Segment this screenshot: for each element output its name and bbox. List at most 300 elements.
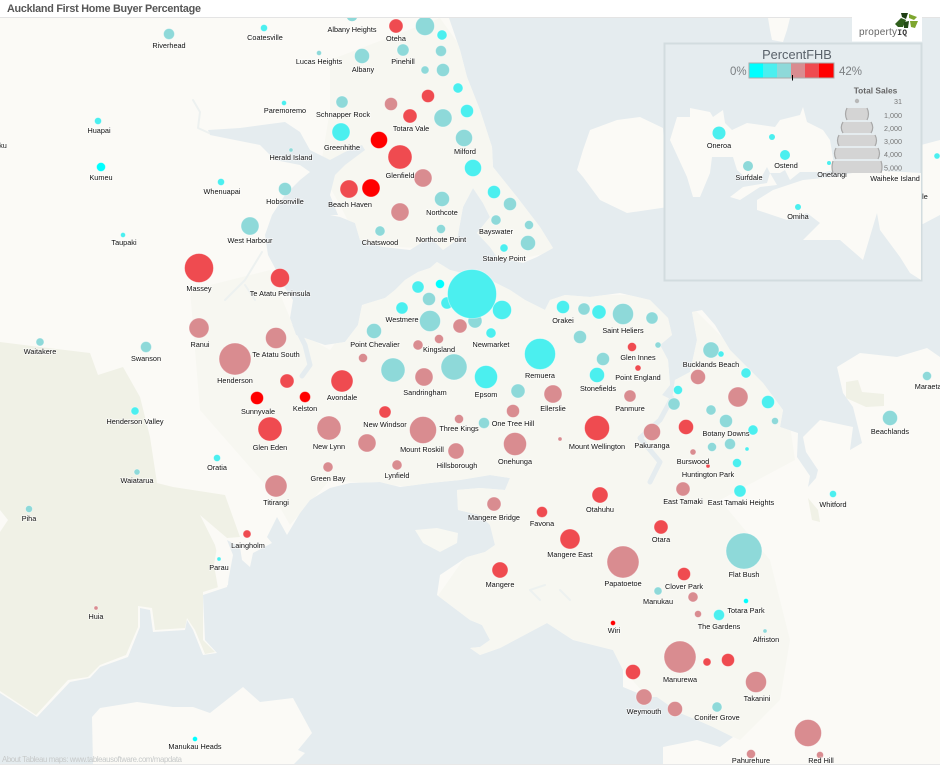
label: Schnapper Rock bbox=[316, 110, 370, 119]
label: Waiatarua bbox=[120, 476, 154, 485]
bubble: Conifer Grove bbox=[712, 702, 722, 712]
label: Chatswood bbox=[362, 238, 398, 247]
label: Conifer Grove bbox=[694, 713, 740, 722]
inset background bbox=[664, 44, 922, 280]
logo: propertyIQ bbox=[852, 13, 922, 42]
colour ramp bbox=[749, 63, 834, 80]
label: Omiha bbox=[787, 212, 810, 221]
label: Otara bbox=[652, 535, 671, 544]
map: Whitford park patch bbox=[808, 498, 820, 522]
bubble: Coatesville bbox=[260, 24, 268, 32]
inset panel: Waiheke Island map and legends bbox=[664, 44, 922, 280]
label: Hillsborough bbox=[437, 461, 477, 470]
bubble: Manukau Heads bbox=[192, 736, 198, 742]
bubble: Whenuapai bbox=[218, 178, 224, 186]
label: Whenuapai bbox=[204, 187, 241, 196]
legend: Total Sales size scale bbox=[832, 86, 902, 173]
bubble: Northcote bbox=[434, 192, 450, 206]
bubble: east of inset bbox=[934, 153, 940, 159]
bubble: Paremoremo bbox=[282, 100, 286, 106]
label: Sandringham bbox=[403, 388, 447, 397]
bubble: Avondale bbox=[331, 370, 353, 392]
bubble: East Tamaki Heights bbox=[734, 485, 746, 497]
inset bubble: Onetangi bbox=[827, 161, 831, 165]
bubble: Taupaki bbox=[120, 232, 126, 238]
bubble: Papakura bbox=[794, 720, 822, 746]
map: Parau foreshore bbox=[214, 547, 230, 588]
bubble: Panmure bbox=[624, 390, 636, 402]
bubble: Oratia bbox=[214, 454, 220, 462]
label: Papatoetoe bbox=[604, 579, 642, 588]
label: Onetangi bbox=[817, 170, 847, 179]
label: Titirangi bbox=[263, 498, 289, 507]
bubble: New Lynn bbox=[317, 416, 341, 440]
bubble: Albany bbox=[354, 48, 370, 64]
label: Mount Roskill bbox=[400, 445, 444, 454]
inset bubble: Oneroa bbox=[712, 126, 726, 140]
bubble: Ranui bbox=[189, 318, 209, 338]
bubble: Howick bbox=[728, 387, 748, 407]
label: Riverhead bbox=[152, 41, 186, 50]
label: Panmure bbox=[615, 404, 645, 413]
bubble: Grey Lynn bbox=[422, 292, 436, 306]
label: Albany Heights bbox=[327, 25, 377, 34]
bubble: Glen Eden bbox=[258, 417, 282, 441]
bubble: Lucas Heights bbox=[316, 50, 322, 56]
bubble: Hillpark bbox=[694, 610, 702, 618]
label: Huntington Park bbox=[682, 470, 735, 479]
bubble: Waterview bbox=[358, 354, 368, 362]
inset labels bbox=[707, 141, 847, 221]
bubble: Manurewa East bbox=[703, 658, 711, 666]
label: Clover Park bbox=[665, 582, 703, 591]
label: Remuera bbox=[525, 371, 556, 380]
bubble: Takapuna bbox=[464, 160, 482, 176]
label: Glen Eden bbox=[253, 443, 287, 452]
bubble: Huia bbox=[94, 606, 98, 610]
bubble: Goodwood Heights bbox=[688, 592, 698, 602]
bubble: Mission Bay bbox=[578, 303, 590, 315]
bubble: Belmont bbox=[504, 198, 516, 210]
bubble: Huntington Park bbox=[706, 464, 710, 468]
bubble: Highland Park bbox=[678, 420, 694, 434]
label: Weymouth bbox=[627, 707, 661, 716]
bubble: Sunnyvale bbox=[250, 392, 264, 404]
bubble: Henderson Valley bbox=[131, 407, 139, 415]
label: Red Hill bbox=[808, 756, 834, 765]
bubble: Half Moon Bay bbox=[668, 398, 680, 410]
bubble: Devonport bbox=[520, 236, 536, 250]
bubble: Shamrock Park bbox=[732, 458, 742, 468]
label: Paremoremo bbox=[264, 106, 306, 115]
bubble: Eastern Beach north bbox=[718, 351, 724, 357]
label: Greenhithe bbox=[324, 143, 360, 152]
bubble: Cockle Bay bbox=[762, 396, 774, 408]
label: Northcote bbox=[426, 208, 458, 217]
label: Stanley Point bbox=[482, 254, 526, 263]
bubble: Farm Cove bbox=[690, 370, 706, 384]
bubble: Hillsborough bbox=[448, 443, 464, 459]
bubble: Te Atatu Peninsula bbox=[270, 268, 290, 288]
bubble: Henderson bbox=[219, 343, 251, 375]
bubble: Mairangi Bay bbox=[460, 104, 474, 118]
title: Auckland First Home Buyer Percentage bbox=[7, 3, 201, 15]
bubble: Papatoetoe bbox=[607, 546, 639, 578]
label: Lynfield bbox=[385, 471, 409, 480]
bubble: Alfriston bbox=[763, 629, 767, 633]
bubble: Herne Bay bbox=[436, 280, 444, 288]
bubble: Mangere East bbox=[560, 529, 580, 549]
map: Upper Waitemata Harbour bbox=[208, 122, 365, 215]
label: Huapai bbox=[87, 126, 111, 135]
bubble: Botany Downs bbox=[720, 414, 732, 428]
bubble: Wairau Valley bbox=[370, 132, 388, 148]
bubble: Kohimarama bbox=[592, 305, 606, 319]
bubble: Totara Vale bbox=[403, 109, 417, 123]
label: Whitford bbox=[819, 500, 847, 509]
bubble: Kelston bbox=[300, 392, 310, 402]
label: Alfriston bbox=[753, 635, 779, 644]
logo wordmark: propertyIQ bbox=[859, 27, 907, 38]
bubble: Saint Heliers bbox=[612, 304, 634, 324]
bubble: Glendowie bbox=[646, 312, 658, 324]
bubble: Browns Bay bbox=[436, 64, 450, 76]
bubble: Beach Haven bbox=[340, 180, 358, 198]
label: Totara Park bbox=[727, 606, 765, 615]
bubble: Favona bbox=[536, 506, 548, 518]
label: Hobsonville bbox=[266, 197, 304, 206]
label: Point England bbox=[615, 373, 661, 382]
bubble: The Gardens bbox=[714, 610, 724, 620]
bubble: Golflands bbox=[708, 442, 716, 452]
attribution text: About Tableau maps: www.tableausoftware.com/mapdata bbox=[2, 755, 183, 764]
bubble: Pahurehure bbox=[746, 750, 756, 758]
bubble: Parau bbox=[217, 557, 221, 561]
label: Pakuranga bbox=[634, 441, 671, 450]
label: Three Kings bbox=[439, 424, 479, 433]
label: Mangere East bbox=[547, 550, 593, 559]
label: Oteha bbox=[386, 34, 407, 43]
label: Avondale bbox=[327, 393, 357, 402]
bubble: Riverhead bbox=[164, 28, 174, 40]
bubble: Newmarket bbox=[486, 328, 496, 338]
bubble: Albany Heights bbox=[347, 18, 357, 21]
label: Oratia bbox=[207, 463, 228, 472]
bubble: Green Bay bbox=[323, 462, 333, 472]
bubble: Massey bbox=[184, 254, 214, 282]
bubble: Kingsland bbox=[434, 334, 444, 344]
label: Point Chevalier bbox=[350, 340, 400, 349]
bubble: Te Atatu South bbox=[266, 328, 286, 348]
bubble: Meadowbank bbox=[574, 330, 586, 344]
label: Oneroa bbox=[707, 141, 732, 150]
legend min: 0% bbox=[730, 66, 747, 78]
size swatch 5,000 bbox=[832, 161, 882, 173]
label: Flat Bush bbox=[729, 570, 759, 579]
map: harbour island bbox=[415, 528, 458, 552]
bubble: Birkenhead bbox=[391, 203, 409, 221]
bubble: Stanley Point bbox=[500, 244, 508, 252]
label: Green Bay bbox=[311, 474, 346, 483]
bubble: Lynfield bbox=[392, 460, 402, 470]
bubble: Onehunga bbox=[504, 432, 526, 456]
bubble: Manurewa bbox=[664, 641, 696, 673]
bubble: Northcote Point bbox=[436, 224, 446, 234]
bubble: Unsworth Heights bbox=[422, 90, 434, 102]
bubble: Mount Eden bbox=[441, 354, 467, 380]
bubble: Wiri bbox=[610, 620, 616, 626]
size values: 1,000 bbox=[884, 111, 902, 120]
bubble: Sandringham bbox=[415, 368, 433, 386]
bubble: Wattle Downs bbox=[668, 702, 682, 716]
bubble: Waitakere bbox=[36, 338, 44, 346]
bubble: Narrow Neck bbox=[524, 220, 534, 230]
size values: 2,000 bbox=[884, 124, 902, 133]
label: Taupaki bbox=[111, 238, 137, 247]
label: Beachlands bbox=[871, 427, 909, 436]
label: Waitakere bbox=[24, 347, 56, 356]
bubble: Pinehill bbox=[397, 44, 409, 56]
bubble: Point Chevalier bbox=[366, 324, 382, 338]
bubble: Shelly Park bbox=[772, 418, 778, 424]
map: small island north bbox=[768, 18, 790, 42]
bubble: Northcross bbox=[437, 30, 447, 40]
label: Coatesville bbox=[247, 33, 283, 42]
map: creeks and estuaries bbox=[193, 100, 672, 600]
bubble: Burswood bbox=[690, 449, 696, 455]
bubble: Mount Roskill bbox=[410, 416, 436, 444]
bottom edge line bbox=[0, 764, 940, 765]
label: Burswood bbox=[677, 457, 709, 466]
label: Waiheke Island: Waiheke Island bbox=[870, 174, 920, 183]
bubble: Dannemora bbox=[724, 438, 736, 450]
map: Manukau Heads peninsula bbox=[92, 687, 312, 765]
bubble: Schnapper Rock bbox=[336, 96, 348, 108]
bubble: Eden Terrace bbox=[453, 319, 467, 333]
label: Henderson Valley bbox=[106, 417, 164, 426]
bubble: Mangere bbox=[492, 562, 508, 578]
bubble: Otara bbox=[654, 520, 668, 534]
inset land: Waiheke Island and Ponui bbox=[670, 107, 921, 280]
label: Newmarket bbox=[473, 340, 509, 349]
bubble: Clendon Park bbox=[626, 664, 640, 680]
bubble: Freemans Bay bbox=[441, 297, 453, 309]
bubble: Mount Eden north bbox=[468, 314, 482, 328]
bubble: Whitford bbox=[830, 490, 836, 498]
bubble: Mount Wellington bbox=[584, 416, 610, 440]
bubble: Ellerslie bbox=[544, 385, 562, 403]
label: One Tree Hill bbox=[492, 419, 535, 428]
bubble: Northpark bbox=[745, 447, 749, 451]
inset bubble: Omiha bbox=[795, 204, 801, 210]
legend max: 42% bbox=[839, 66, 862, 78]
map: land east of inset bbox=[921, 140, 940, 225]
label: Pinehill bbox=[391, 57, 415, 66]
label: Massey bbox=[186, 284, 212, 293]
label: Takanini bbox=[744, 694, 771, 703]
bubble: Beachlands bbox=[882, 410, 898, 426]
label: Ostend bbox=[774, 161, 798, 170]
label: Albany bbox=[352, 65, 375, 74]
label: Mangere Bridge bbox=[468, 513, 520, 522]
bubble: Manukau bbox=[654, 587, 662, 595]
bubble: Herald Island bbox=[289, 148, 293, 152]
inset bubble: Palm Beach bbox=[769, 134, 775, 140]
bubble: Mangere Bridge bbox=[487, 497, 501, 511]
label: Onehunga bbox=[498, 457, 533, 466]
label: East Tamaki bbox=[663, 497, 703, 506]
bubble: Mount Albert bbox=[381, 358, 405, 382]
bubble: Milford bbox=[456, 130, 472, 146]
label: Botany Downs bbox=[702, 429, 750, 438]
bubble: Waiatarua bbox=[134, 469, 140, 475]
bubble: Birkdale bbox=[362, 179, 380, 197]
label: East Tamaki Heights bbox=[708, 498, 775, 507]
bubble: Eastern Beach bbox=[741, 368, 751, 378]
size values: 4,000 bbox=[884, 150, 902, 159]
bubble: Morningside bbox=[413, 340, 423, 350]
label: Bayswater bbox=[479, 227, 514, 236]
map: Beachlands park patch bbox=[846, 380, 884, 407]
bubble: One Tree Hill east bbox=[506, 404, 520, 418]
bubble: Three Kings bbox=[454, 414, 464, 424]
bubble: Parnell bbox=[492, 300, 512, 320]
bubble: Weymouth bbox=[636, 689, 652, 705]
bubble: Windsor Park bbox=[421, 66, 429, 74]
bubble: Swanson bbox=[140, 342, 152, 352]
bubble: Piha bbox=[26, 506, 32, 512]
bubble: Maraetai bbox=[922, 372, 932, 380]
bubble: Otahuhu bbox=[592, 487, 608, 503]
bubble: Auckland Central bbox=[448, 270, 496, 318]
label: Surfdale bbox=[735, 173, 763, 182]
size values: 31 bbox=[894, 97, 902, 106]
size swatch 1,000 bbox=[846, 108, 868, 120]
label: Epsom bbox=[475, 390, 497, 399]
label: Saint Heliers bbox=[602, 326, 644, 335]
label: Mangere bbox=[486, 580, 514, 589]
size swatch 31 bbox=[855, 99, 859, 103]
label: Orakei bbox=[552, 316, 574, 325]
label: Manukau bbox=[643, 597, 673, 606]
bubble: Hauraki bbox=[488, 186, 500, 198]
label: Ellerslie bbox=[540, 404, 566, 413]
legend: PercentFHB colour scale bbox=[730, 47, 862, 80]
bubble: New Windsor bbox=[379, 406, 391, 418]
bubble: Laingholm bbox=[243, 530, 251, 538]
bubble: Westmere bbox=[396, 302, 408, 314]
label: Huia bbox=[88, 612, 104, 621]
label: Glenfield bbox=[386, 171, 414, 180]
bubble: Rothesay Bay bbox=[436, 46, 446, 56]
label: Otahuhu bbox=[586, 505, 614, 514]
label: Piha bbox=[22, 514, 37, 523]
bubble: Point England bbox=[635, 365, 641, 371]
map: Rangitoto Island bbox=[577, 117, 668, 213]
bubble: Takanini bbox=[746, 672, 766, 692]
label: Pahurehure bbox=[732, 756, 770, 765]
bubble: Titirangi bbox=[265, 475, 287, 497]
label: Laingholm bbox=[231, 541, 265, 550]
bubble: Orakei bbox=[556, 300, 570, 314]
label: Ranui bbox=[190, 340, 210, 349]
label: Kelston bbox=[293, 404, 317, 413]
bubble: Somerville bbox=[748, 425, 758, 435]
size values: 5,000 bbox=[884, 164, 902, 172]
bubble: Glendene bbox=[280, 374, 294, 388]
bubble: Mellons Bay bbox=[706, 405, 716, 415]
label: Parau bbox=[209, 563, 229, 572]
map: west coast headland bbox=[0, 510, 8, 532]
bubble: Penrose bbox=[558, 437, 562, 441]
bubble: Westmere north bbox=[412, 281, 424, 293]
bubble: Blockhouse Bay bbox=[358, 434, 376, 452]
label: Stonefields bbox=[580, 384, 616, 393]
label: Glen Innes bbox=[620, 353, 656, 362]
bubble: Forrest Hill bbox=[434, 109, 452, 127]
bubble: Bucklands Beach bbox=[703, 342, 719, 358]
bubble: Totara Park bbox=[744, 598, 748, 604]
label: Bucklands Beach bbox=[683, 360, 739, 369]
label: Favona bbox=[530, 519, 555, 528]
bubble: Randwick Park bbox=[722, 654, 734, 666]
label: Mount Wellington bbox=[569, 442, 625, 451]
label: Manurewa bbox=[663, 675, 698, 684]
bubble: Clover Park bbox=[678, 568, 690, 580]
label: Northcote Point bbox=[416, 235, 466, 244]
bubble: Chatswood bbox=[375, 226, 385, 236]
map: urban land tint bbox=[190, 18, 795, 740]
label: New Windsor bbox=[363, 420, 407, 429]
size values: 3,000 bbox=[884, 137, 902, 146]
bubble: Pakuranga bbox=[644, 424, 660, 440]
label: Totara Vale bbox=[393, 124, 429, 133]
label: Henderson bbox=[217, 376, 253, 385]
inset bubble: Ostend bbox=[780, 150, 790, 160]
label: Manukau Heads bbox=[168, 742, 222, 751]
label: Milford bbox=[454, 147, 476, 156]
bubble: Glendowie west bbox=[596, 352, 610, 366]
size legend title: Total Sales bbox=[854, 86, 898, 96]
size swatch 2,000 bbox=[841, 122, 873, 133]
bubble: Greenhithe bbox=[332, 123, 350, 141]
legend title: PercentFHB bbox=[762, 47, 832, 62]
label: The Gardens bbox=[698, 622, 741, 631]
label: Herald Island bbox=[270, 153, 312, 162]
bubble: Hillcrest bbox=[414, 169, 432, 187]
size swatch edges bbox=[832, 108, 882, 173]
bubble: Sunnyhills bbox=[674, 386, 682, 394]
label: Beach Haven bbox=[328, 200, 372, 209]
map: Waitakere Ranges forest bbox=[0, 342, 240, 715]
bubble: Oteha bbox=[389, 19, 403, 33]
label: Te Atatu Peninsula bbox=[250, 289, 311, 298]
bubble: Glen Innes bbox=[628, 342, 636, 352]
label: le bbox=[922, 192, 928, 201]
bubble: Glenfield bbox=[388, 145, 412, 169]
bubble: West Harbour bbox=[241, 217, 259, 235]
size values bbox=[884, 97, 902, 172]
bubble: Huapai bbox=[94, 118, 102, 124]
label: Kumeu bbox=[89, 173, 113, 182]
label: West Harbour bbox=[228, 236, 273, 245]
label: Sunnyvale bbox=[241, 407, 275, 416]
label: Lucas Heights bbox=[296, 57, 342, 66]
label: New Lynn bbox=[313, 442, 345, 451]
inset bubble: Surfdale bbox=[743, 161, 753, 171]
bubble: Greenhithe north bbox=[384, 98, 398, 110]
bubble: East Tamaki bbox=[676, 482, 690, 496]
